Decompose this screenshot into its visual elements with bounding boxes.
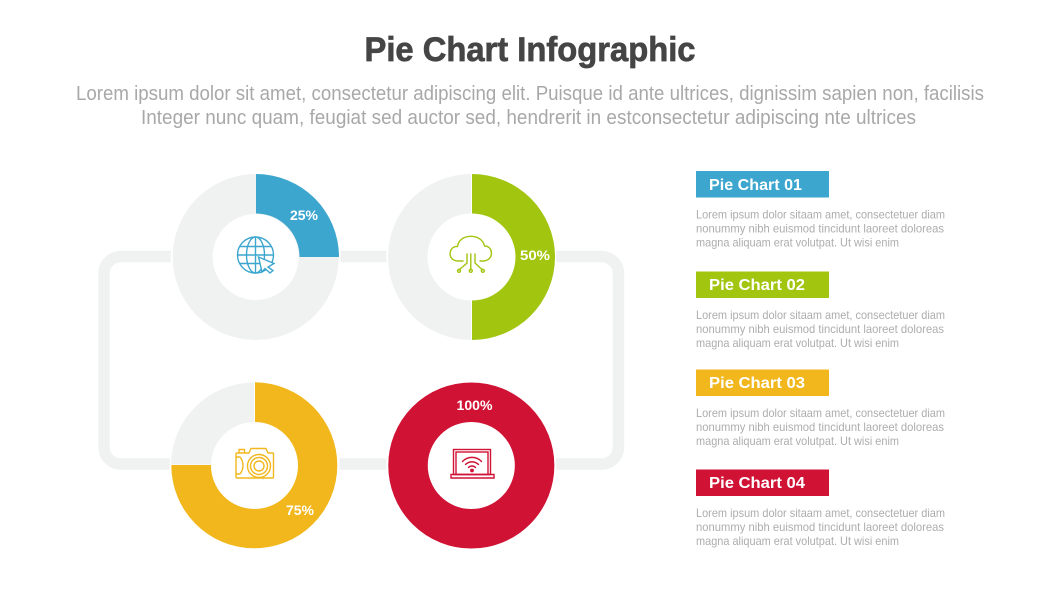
description 02: magna aliquam erat volutpat. Ut wisi enim [696, 336, 899, 350]
description 04: Lorem ipsum dolor sitaam amet, consectetuer diam [696, 506, 945, 520]
description 01: magna aliquam erat volutpat. Ut wisi enim [696, 236, 899, 250]
description 03 [696, 406, 945, 448]
description 02 [696, 308, 945, 350]
description 04: magna aliquam erat volutpat. Ut wisi enim [696, 534, 899, 548]
value 75%: 75% [286, 502, 315, 518]
panel: legend 04 [696, 470, 945, 548]
label text 03: Pie Chart 03 [709, 375, 805, 392]
ring track [388, 174, 471, 340]
description 01: nonummy nibh euismod tincidunt laoreet doloreas [696, 222, 944, 236]
label text 04: Pie Chart 04 [709, 475, 805, 492]
panel: pie chart 03 [170, 380, 340, 550]
ring segment 25% [256, 174, 339, 257]
connector loop [104, 256, 618, 464]
description 03: Lorem ipsum dolor sitaam amet, consectetuer diam [696, 406, 945, 420]
description 01: Lorem ipsum dolor sitaam amet, consectetuer diam [696, 208, 945, 222]
subtitle [76, 83, 984, 129]
panel: pie chart 01 [171, 172, 341, 342]
value 25%: 25% [290, 207, 319, 223]
ring background [170, 380, 340, 550]
label bar 02 [696, 272, 829, 298]
ring background [386, 380, 556, 550]
label bar 01 [696, 171, 829, 198]
description 02: nonummy nibh euismod tincidunt laoreet doloreas [696, 322, 944, 336]
description 02: Lorem ipsum dolor sitaam amet, consectetuer diam [696, 308, 945, 322]
subtitle: Integer nunc quam, feugiat sed auctor sed, hendrerit in estconsectetur adipiscing nte ultrices [141, 107, 916, 129]
title: Pie Chart Infographic [364, 31, 696, 69]
icon: laptop wifi [451, 450, 494, 478]
label text 02: Pie Chart 02 [709, 277, 805, 294]
description 04: nonummy nibh euismod tincidunt laoreet doloreas [696, 520, 944, 534]
icon: camera [236, 448, 274, 478]
ring track [193, 194, 319, 320]
ring background [171, 172, 341, 342]
ring segment 100% [408, 402, 535, 529]
panel: legend 02 [696, 272, 945, 350]
description 03: magna aliquam erat volutpat. Ut wisi enim [696, 434, 899, 448]
ring background [386, 172, 556, 342]
panel: pie chart 02 [386, 172, 556, 342]
subtitle: Lorem ipsum dolor sit amet, consectetur adipiscing elit. Puisque id ante ultrices, dignissim sapien non, facilisis [76, 83, 984, 105]
label text 01: Pie Chart 01 [709, 177, 802, 194]
panel: legend 01 [696, 171, 945, 250]
icon: cloud network [450, 236, 491, 272]
description 03: nonummy nibh euismod tincidunt laoreet doloreas [696, 420, 944, 434]
panel: pie chart 04 [386, 380, 556, 550]
label bar 04 [696, 470, 829, 496]
label bar 03 [696, 370, 829, 396]
ring segment 50% [472, 174, 555, 340]
description 01 [696, 208, 945, 250]
ring segment 75% [171, 382, 337, 548]
panel: legend 03 [696, 370, 945, 448]
value 100%: 100% [456, 397, 493, 413]
value 50%: 50% [520, 247, 551, 263]
description 04 [696, 506, 945, 548]
icon: globe with cursor [238, 237, 274, 273]
ring track [171, 382, 254, 464]
